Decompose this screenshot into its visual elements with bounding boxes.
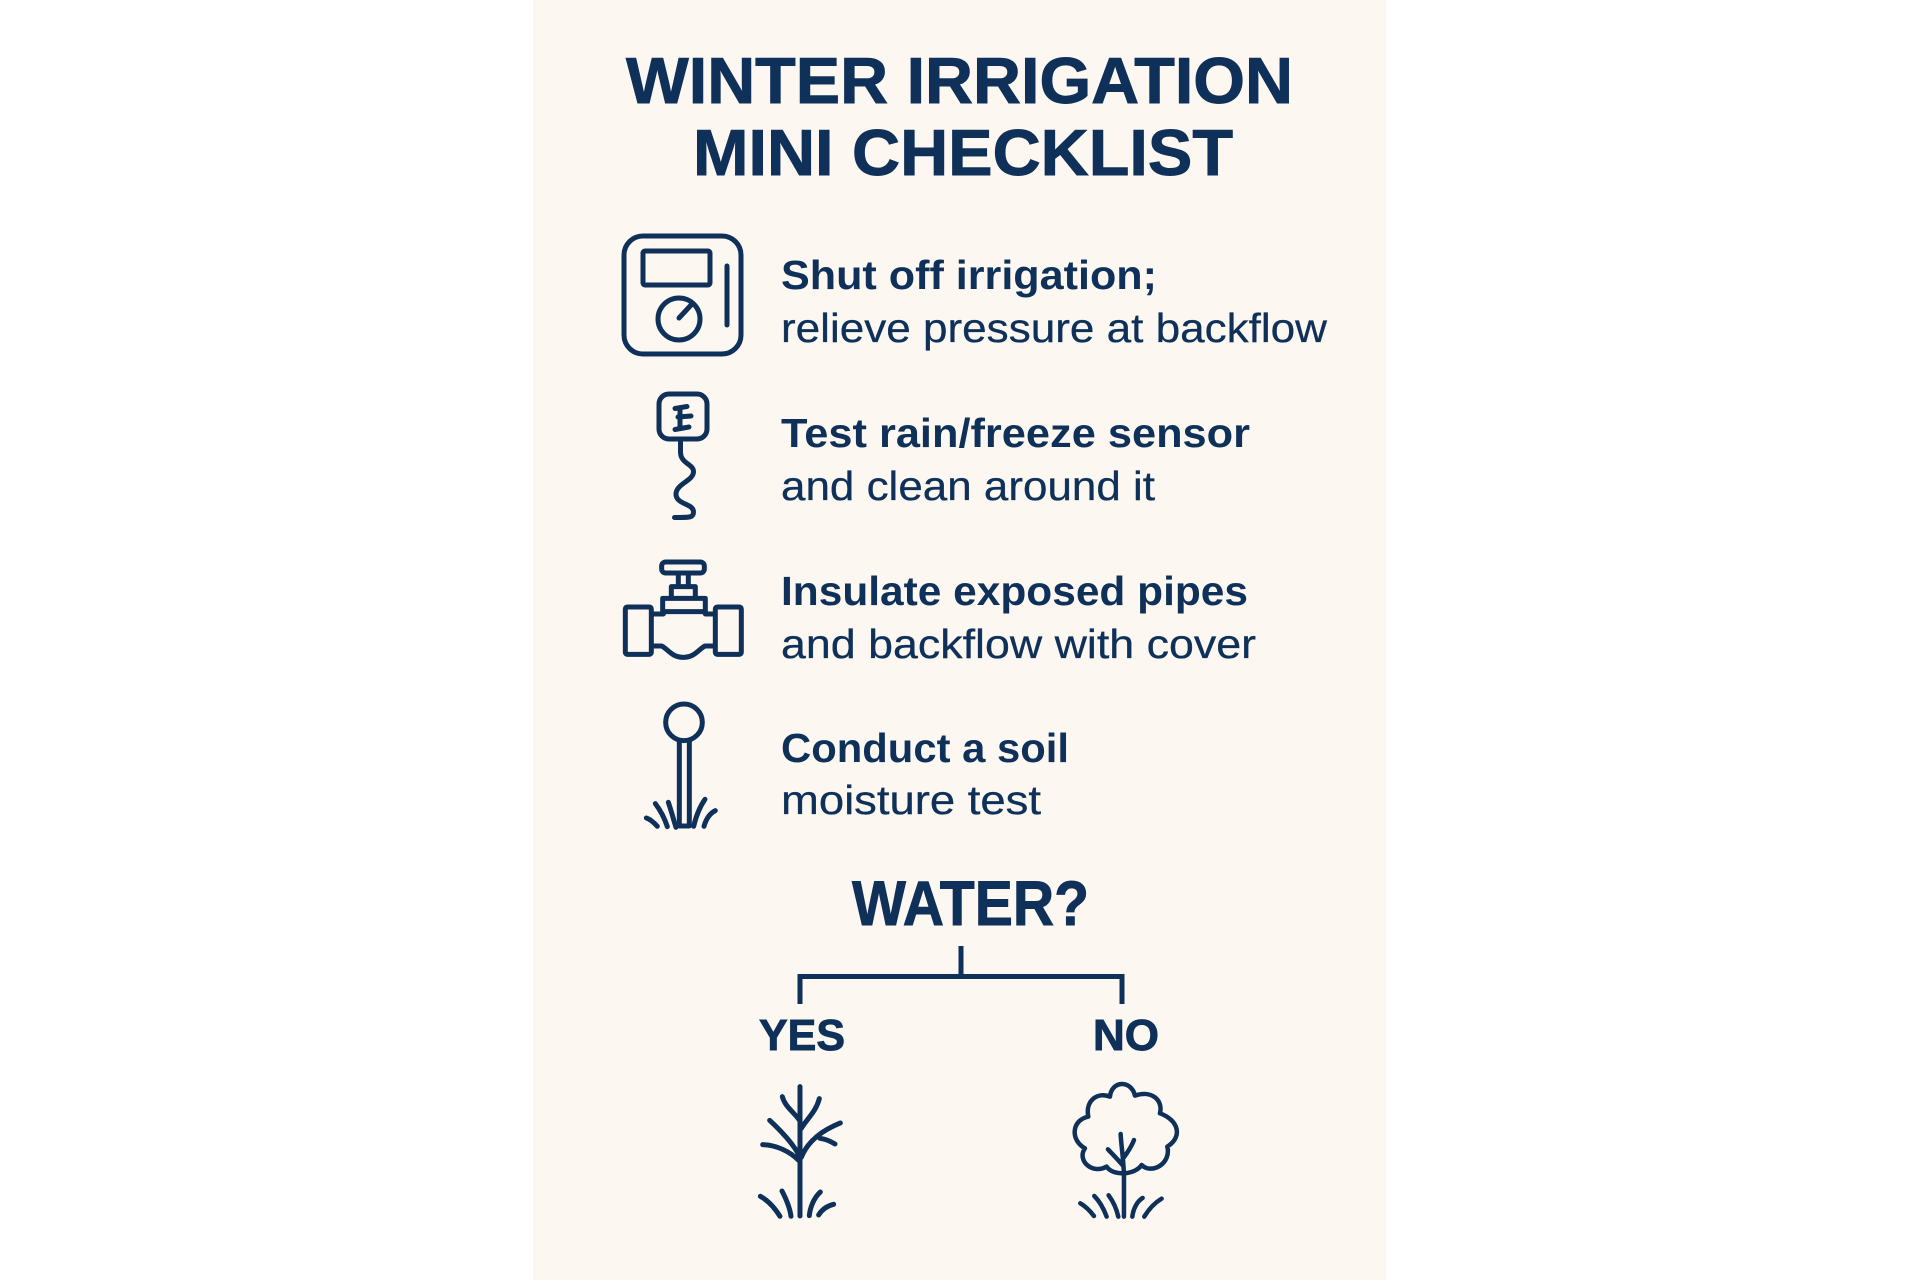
step 3 text: Insulate exposed pipes	[781, 568, 1248, 614]
step 3 text	[781, 568, 1256, 667]
icon: dormant bare tree	[760, 1087, 840, 1216]
step 4 text	[781, 725, 1069, 823]
step 4 text: moisture test	[781, 777, 1042, 823]
step 1 text: Shut off irrigation;	[781, 252, 1157, 298]
step 2 text: Test rain/freeze sensor	[781, 410, 1250, 456]
icon: rain/freeze sensor	[659, 394, 707, 518]
step 2 text: and clean around it	[781, 463, 1156, 509]
step 1 text	[781, 252, 1327, 351]
label: yes: YES	[759, 1011, 845, 1060]
label: no: NO	[1093, 1011, 1159, 1060]
step 2 text	[781, 410, 1250, 509]
title: WINTER IRRIGATION	[626, 44, 1293, 117]
step 1 text: relieve pressure at backflow	[781, 305, 1327, 351]
decision connector	[800, 946, 1122, 1004]
icon: soil moisture probe	[646, 704, 715, 827]
panel: cream background	[533, 0, 1386, 1280]
icon: valve	[625, 562, 741, 657]
icon: irrigation controller	[624, 236, 741, 354]
step 3 text: and backflow with cover	[781, 621, 1256, 667]
title	[626, 44, 1293, 189]
heading: water decision: WATER?	[852, 869, 1089, 939]
step 4 text: Conduct a soil	[781, 725, 1069, 771]
title: MINI CHECKLIST	[693, 116, 1233, 189]
icon: leafy tree	[1075, 1084, 1177, 1217]
